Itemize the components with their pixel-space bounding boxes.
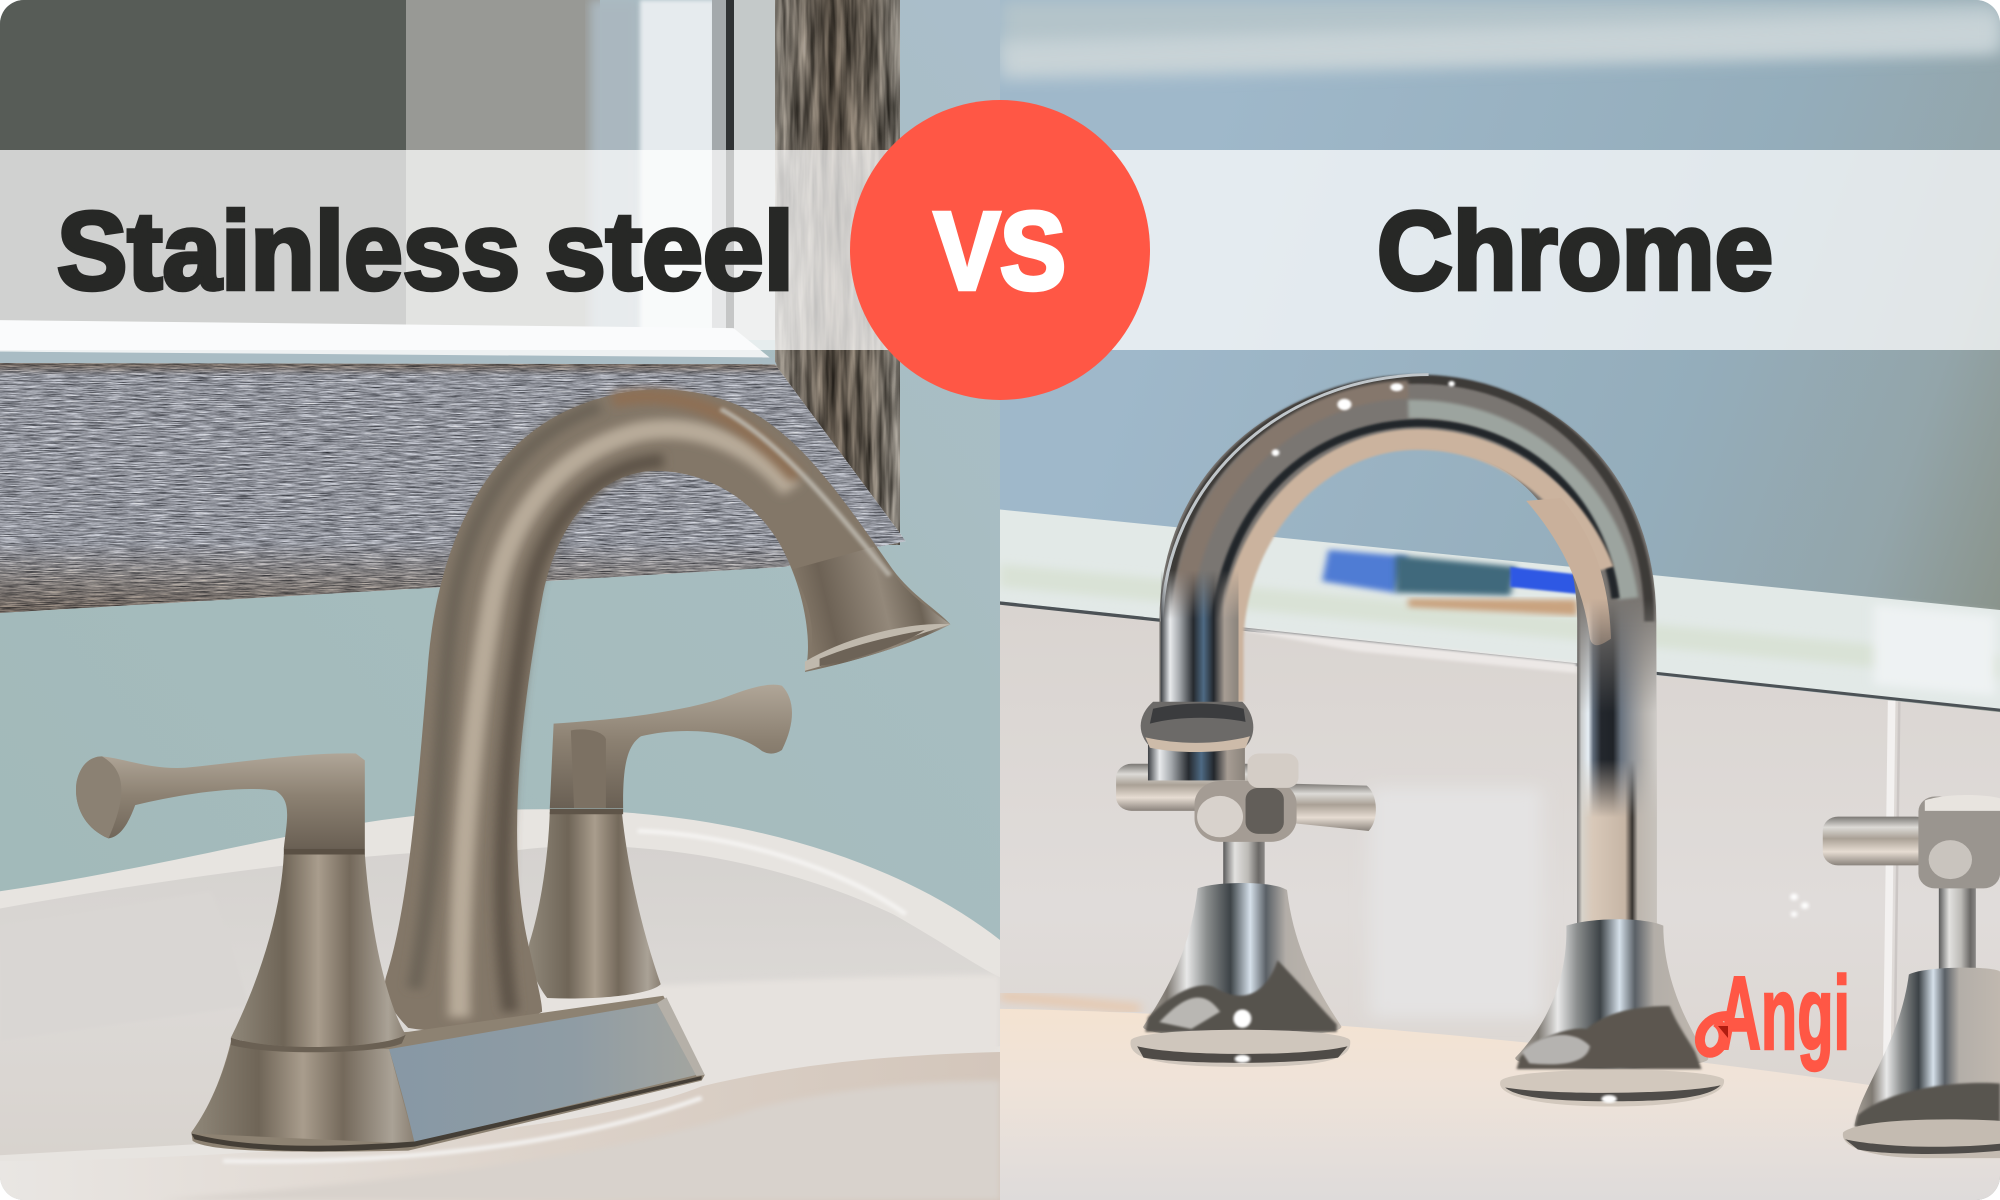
heading: Stainless steel: Stainless <box>57 190 520 313</box>
mirror frame vertical wood <box>775 0 900 545</box>
tile wall <box>1000 601 2000 1115</box>
right handle base <box>529 812 661 998</box>
wall background <box>0 0 1000 1200</box>
panel: chrome photo <box>1000 0 2000 1200</box>
arch beige inner band <box>1232 439 1603 702</box>
VS badge <box>850 100 1150 400</box>
panel: stainless steel photo <box>0 0 1000 1200</box>
chrome spout <box>1161 375 1657 926</box>
mirror reflection <box>1000 0 2000 1200</box>
heading: Stainless steel <box>58 206 788 292</box>
arch specular glints <box>1272 381 1455 456</box>
left handle lever <box>76 753 365 848</box>
right handle lever <box>550 685 792 808</box>
spout shading <box>459 429 791 1018</box>
spout mouth <box>805 624 950 671</box>
VS badge: VS <box>934 190 1066 313</box>
spout tip shading <box>791 547 950 672</box>
centre chrome base <box>1500 919 1724 1106</box>
Angi logo: Angi <box>1718 956 1850 1072</box>
Angi logo <box>1694 972 1846 1072</box>
arch dark line <box>1214 423 1615 644</box>
tile glints <box>1790 894 1809 917</box>
arch brown upper band <box>1182 390 1408 621</box>
left chrome handle <box>1116 702 1376 1067</box>
heading band: chrome <box>1112 150 2000 350</box>
sink <box>0 809 1000 1200</box>
blurred mirror reflection <box>0 0 776 340</box>
deck <box>191 996 705 1152</box>
mirror frame horizontal wood <box>0 363 906 613</box>
counter <box>1000 1009 2000 1200</box>
heading: Stainless steel: steel <box>545 190 794 313</box>
heading band: stainless steel <box>0 150 888 350</box>
mirror bevel <box>1000 510 2000 710</box>
stainless faucet <box>76 389 950 1152</box>
spout <box>385 389 950 1031</box>
left handle base <box>231 854 406 1047</box>
arch light band <box>1408 409 1628 598</box>
arch outer dark edge <box>1162 373 1656 622</box>
right chrome handle <box>1823 795 2000 1158</box>
arch outer highlight <box>1162 375 1429 621</box>
heading: Chrome: Chrome <box>1377 190 1773 313</box>
mirror liner <box>0 320 777 365</box>
